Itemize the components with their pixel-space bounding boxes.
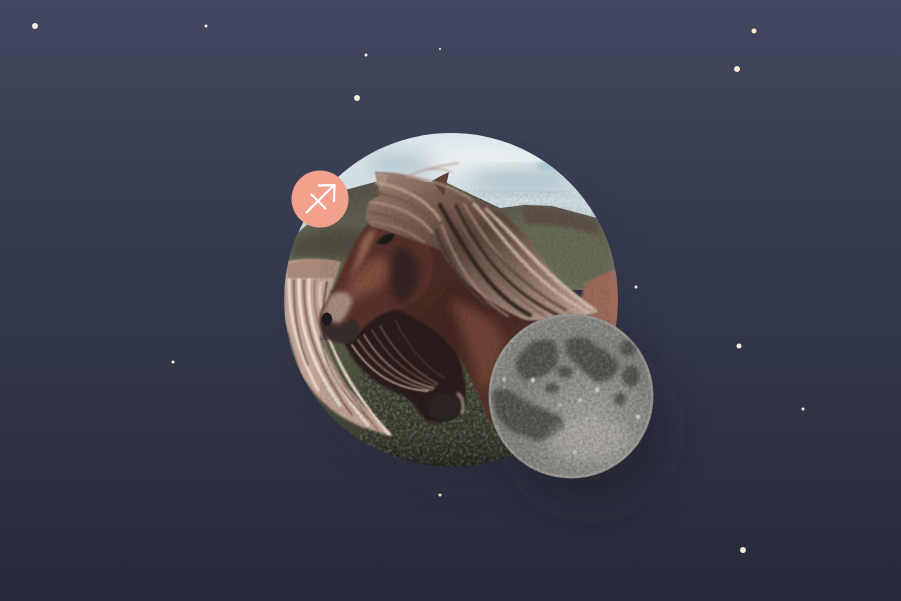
sky bbox=[284, 133, 618, 263]
coat grain bbox=[320, 190, 610, 430]
lunar maria bbox=[492, 337, 640, 441]
muzzle bbox=[322, 292, 352, 323]
grass bbox=[289, 340, 513, 467]
stars bbox=[32, 23, 804, 553]
icon: sagittarius arrow bbox=[306, 185, 334, 213]
front horse body and neck bbox=[398, 245, 591, 424]
photo circle: horses bbox=[284, 133, 620, 470]
sagittarius badge bbox=[292, 170, 348, 228]
shadows bbox=[320, 175, 665, 505]
front horse head bbox=[319, 215, 433, 343]
flowing mane bbox=[366, 163, 598, 321]
back horse dark head bbox=[340, 301, 466, 423]
moon bbox=[488, 313, 654, 479]
back horse mane bbox=[284, 259, 444, 436]
eye bbox=[376, 234, 395, 245]
mountains bbox=[284, 182, 620, 290]
back horse rump bbox=[580, 268, 618, 327]
